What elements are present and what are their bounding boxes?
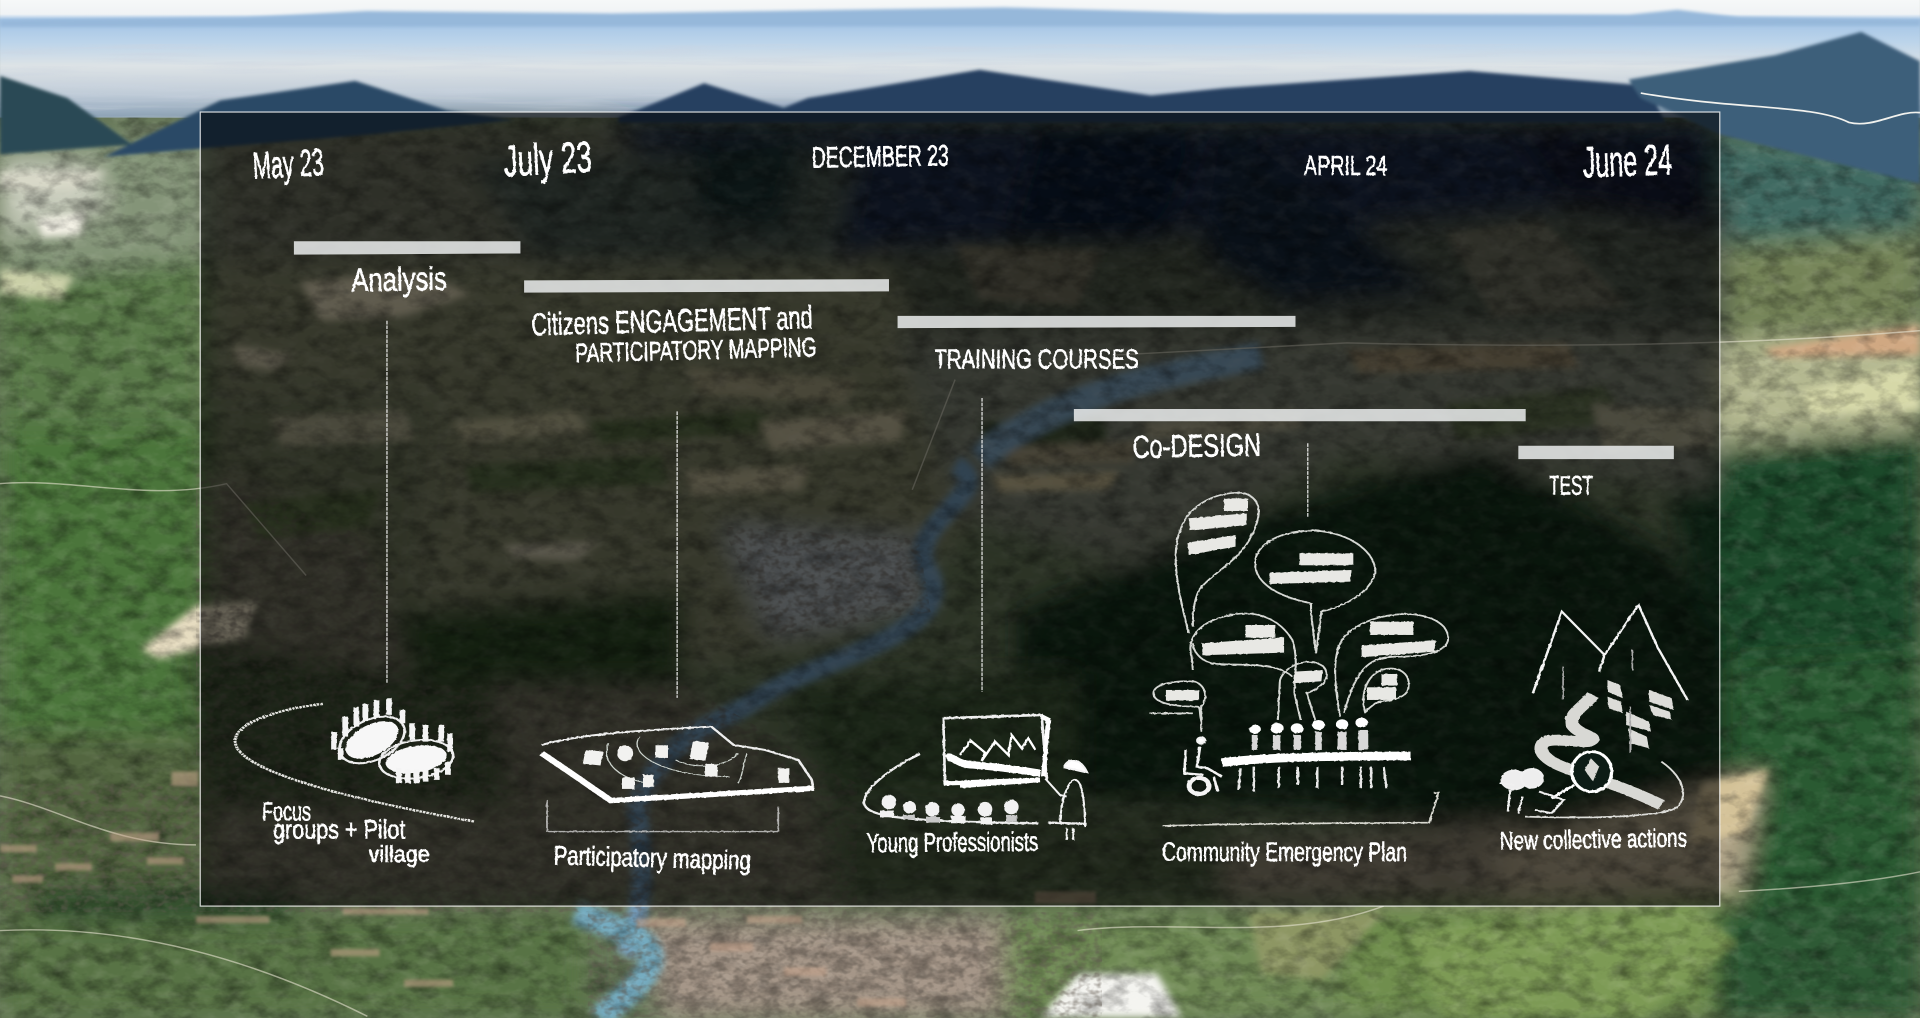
bar: Analysis: [294, 241, 520, 255]
valley fields: [208, 263, 1004, 686]
teacher: [1045, 760, 1087, 840]
connector: Co-design: [1307, 443, 1309, 517]
pale field patches: [300, 272, 471, 321]
text: Focus groups + Pilot village: village: [369, 841, 430, 867]
valley field strips: [453, 410, 588, 443]
text: Focus groups + Pilot village: groups + Pilot: [273, 815, 406, 845]
label: Citizens engagement and participatory mapping: [531, 299, 817, 368]
speech bubbles: [1149, 493, 1448, 732]
trees: [1607, 680, 1674, 748]
bar: Training courses: [898, 316, 1295, 328]
contour lines: [607, 737, 747, 783]
connector: Participatory: [676, 411, 678, 698]
route line: [235, 704, 475, 822]
month: July 23: July 23: [502, 133, 593, 186]
text: New collective actions: New collective actions: [1500, 824, 1687, 856]
distant ridges: [0, 32, 1920, 184]
seated person with glasses: [1500, 769, 1564, 813]
bracket: [547, 800, 778, 832]
bar: Test: [1518, 446, 1674, 459]
phase labels: [351, 261, 1593, 501]
text: Community Emergency Plan: Community Emergency Plan: [1162, 837, 1407, 867]
ground curve: [1525, 762, 1683, 817]
mountains: [1533, 605, 1687, 700]
audience people: [880, 795, 1019, 825]
sketch: participatory map: [542, 727, 814, 832]
bar: Citizens engagement: [524, 279, 889, 293]
month: December 23: DECEMBER 23: [811, 139, 949, 175]
audience curve: [864, 754, 1087, 824]
label: Analysis: Analysis: [351, 261, 447, 299]
dark forest slope: [1016, 447, 1726, 833]
people at table: [1249, 718, 1368, 750]
gantt bars: [294, 241, 1674, 459]
sketch: new collective actions: [1500, 605, 1687, 817]
connector: Training: [981, 398, 983, 692]
label: Training courses: TRAINING COURSES: [934, 344, 1139, 375]
board mountains: [960, 735, 1035, 761]
panel: translucent timeline frame: [200, 112, 1720, 906]
label: Citizens engagement and participatory mapping: PARTICIPATORY MAPPING: [575, 332, 817, 368]
connector: Analysis: [386, 321, 388, 683]
magnifying glass: [1572, 752, 1612, 792]
winding road: [1541, 695, 1661, 805]
town lower left: [208, 465, 833, 900]
table ellipse two: [374, 734, 459, 784]
town rooftops: [0, 771, 1096, 1006]
bubble notes: [1166, 498, 1435, 701]
table ellipse one: [327, 707, 417, 773]
map markers: [583, 741, 789, 789]
sketch: focus groups: [235, 698, 475, 822]
month: May 23: May 23: [252, 142, 325, 188]
text: Focus groups + Pilot village: [262, 798, 430, 867]
timeline header: months: [252, 133, 1673, 188]
label: Citizens engagement and participatory mapping: Citizens ENGAGEMENT and: [531, 299, 813, 342]
month: April 24: APRIL 24: [1304, 150, 1387, 181]
connector lines: [387, 321, 1308, 698]
map outline: [542, 727, 813, 787]
sketch: training classroom: [864, 715, 1087, 840]
river: [980, 355, 1261, 459]
label: Test: TEST: [1549, 471, 1593, 501]
roads: [0, 331, 1920, 1016]
text: Focus groups + Pilot village: Focus: [262, 798, 311, 826]
left and right outside terrain: [0, 129, 208, 294]
table: [1222, 756, 1411, 763]
label: Co-design: Co-DESIGN: [1132, 427, 1261, 465]
upper mountains inside panel: [208, 122, 735, 269]
people around tables: [334, 698, 450, 783]
wheelchair person: [1185, 738, 1222, 794]
sketch: community table and speech bubbles: [1149, 493, 1448, 826]
month: June 24: June 24: [1582, 135, 1673, 188]
text: Young Professionists: Young Professionists: [867, 827, 1038, 858]
bottom band: [0, 912, 588, 1018]
plan baseline: [1163, 793, 1439, 826]
map thick edge: [542, 753, 814, 801]
bar: Co-design: [1074, 409, 1526, 421]
text: Participatory mapping: Participatory mapping: [553, 840, 751, 876]
dark forest ridges: [1200, 122, 1445, 306]
blackboard: [943, 715, 1047, 782]
